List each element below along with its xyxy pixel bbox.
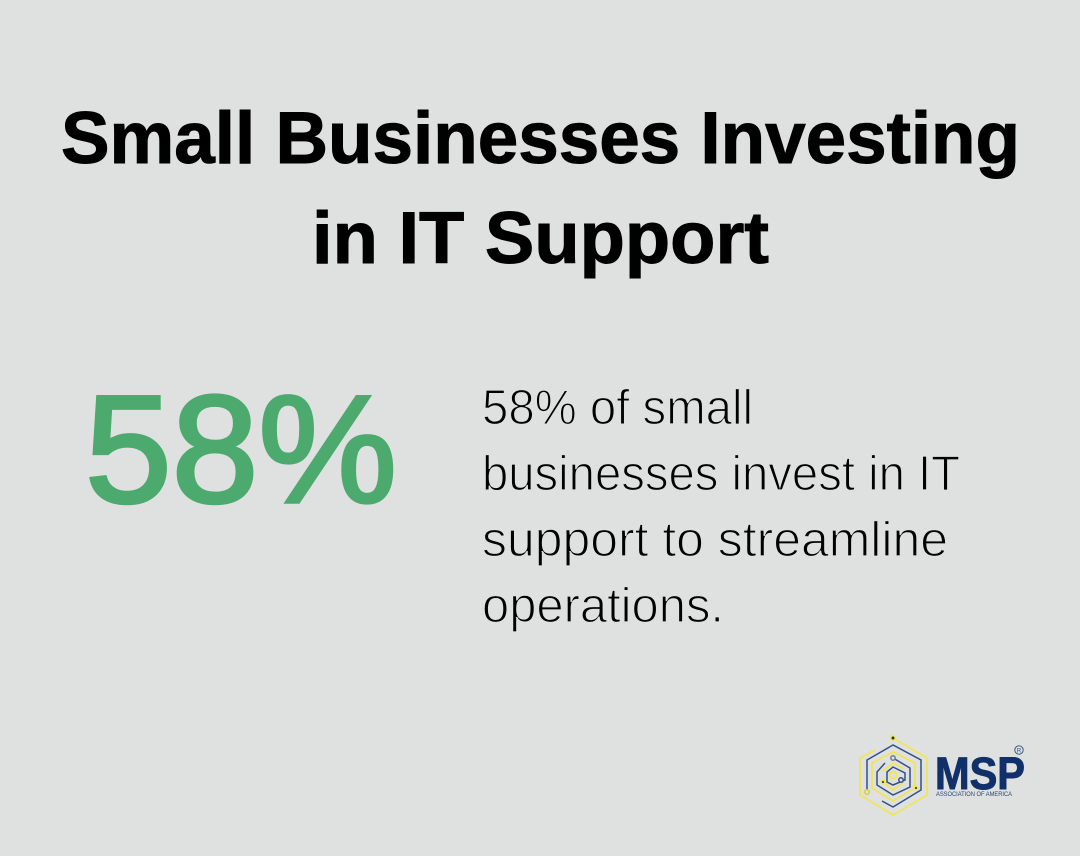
registered mark: R (1017, 748, 1022, 754)
title: in IT Support (312, 198, 769, 279)
tagline: ASSOCIATION OF AMERICA (936, 791, 1013, 798)
description text: support to streamline (482, 513, 948, 567)
title: Small Businesses Investing (61, 98, 1020, 179)
description text: operations. (482, 579, 724, 633)
description text (482, 381, 960, 633)
description text: businesses invest in IT (482, 447, 960, 501)
title (61, 98, 1020, 279)
logo: MSP Association of America (860, 736, 1025, 815)
description text: 58% of small (482, 381, 753, 435)
wordmark: MSP: MSP (935, 748, 1025, 799)
icon: hexagon circuit (860, 736, 927, 815)
registered mark (1015, 746, 1023, 754)
big statistic: 58%: 58% (85, 364, 397, 535)
